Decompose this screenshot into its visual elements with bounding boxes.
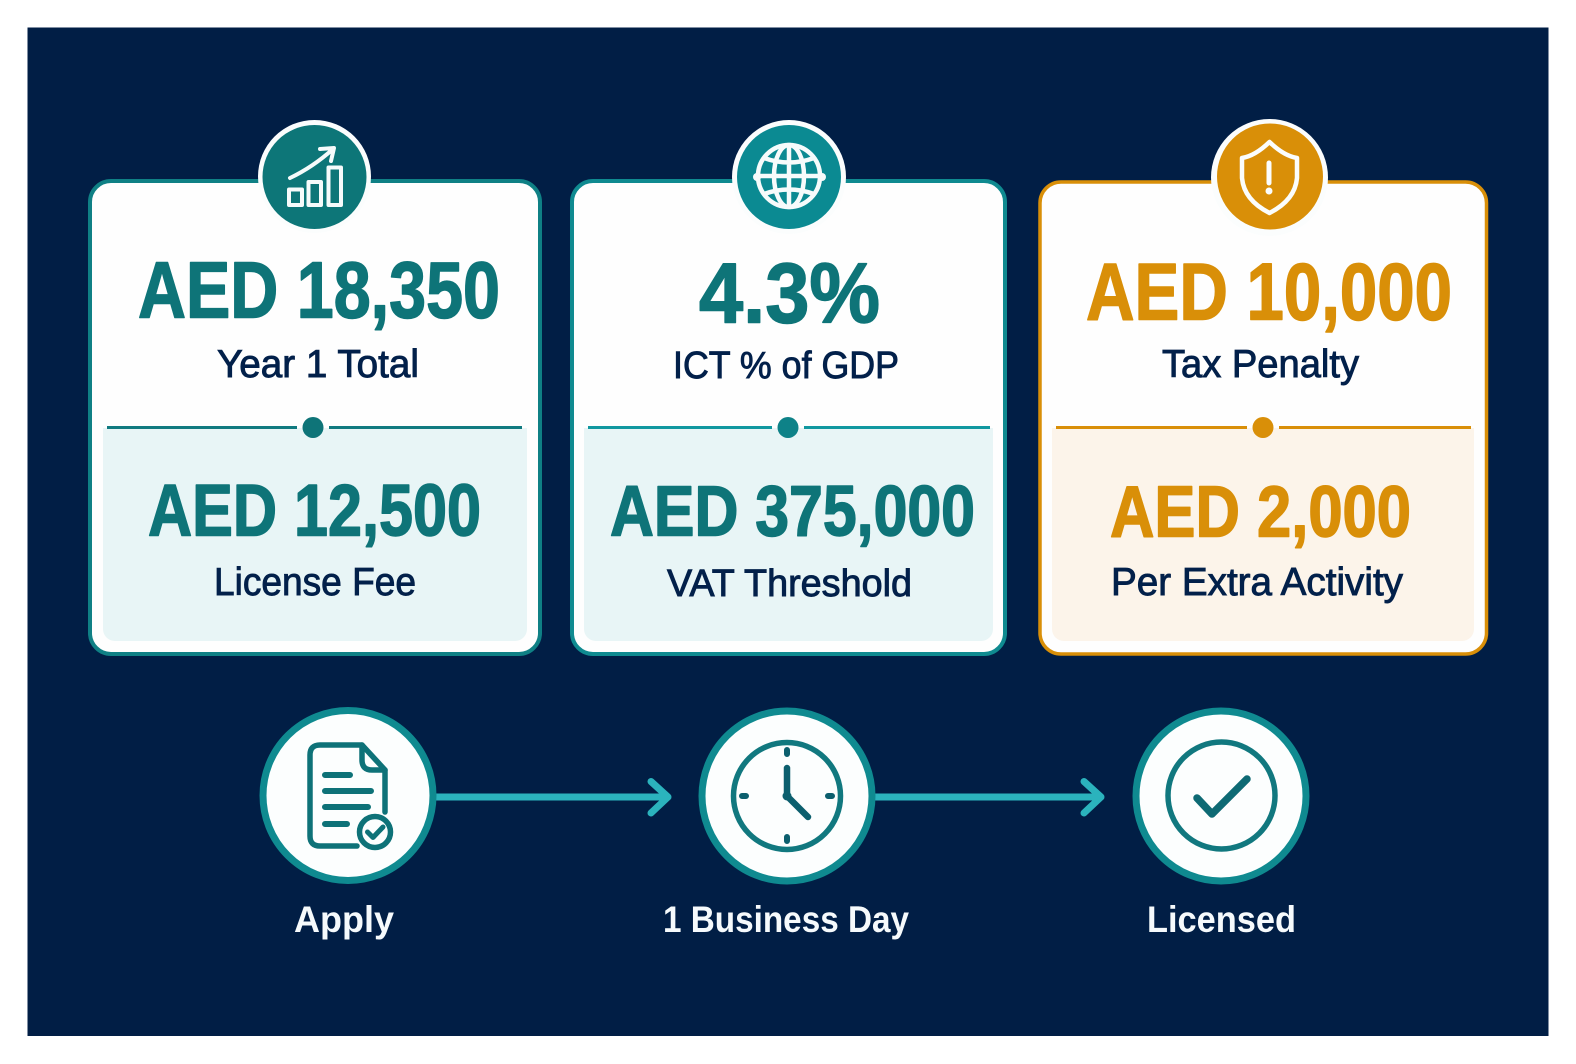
divider dot: [1252, 417, 1274, 438]
lower tint area: [1052, 428, 1474, 641]
label: Year 1 Total: Year 1 Total: [217, 343, 419, 386]
arrow: review to licensed: [873, 782, 1101, 813]
label: License Fee: License Fee: [214, 561, 416, 604]
card frame: [1040, 182, 1486, 654]
label: VAT Threshold: VAT Threshold: [667, 563, 912, 605]
divider dot: [302, 417, 324, 438]
value: 4.3%: 4.3%: [699, 246, 880, 342]
value: AED 12,500: AED 12,500: [148, 470, 481, 552]
label: Tax Penalty: Tax Penalty: [1162, 343, 1359, 386]
panel: ICT and VAT card: [572, 120, 1005, 654]
card frame: [90, 181, 540, 654]
icon: rising bar chart: [258, 120, 371, 233]
panel: year 1 cost card: [90, 120, 540, 654]
step: 1 Business Day: [663, 711, 909, 940]
label: ICT % of GDP: ICT % of GDP: [673, 345, 899, 387]
value: AED 375,000: AED 375,000: [610, 472, 975, 552]
divider dot: [778, 417, 798, 438]
label: Apply: Apply: [294, 899, 394, 940]
value: AED 10,000: AED 10,000: [1086, 248, 1452, 338]
lower tint area: [584, 428, 993, 641]
step: Apply: [263, 710, 433, 940]
label: 1 Business Day: 1 Business Day: [663, 899, 909, 940]
icon: check in circle: [1136, 711, 1306, 881]
icon: globe: [732, 120, 846, 234]
card frame: [572, 181, 1005, 654]
value: AED 18,350: AED 18,350: [138, 246, 500, 334]
label: Licensed: Licensed: [1147, 899, 1296, 940]
step: Licensed: [1136, 711, 1306, 940]
arrow: apply to review: [434, 782, 668, 813]
value: AED 2,000: AED 2,000: [1110, 472, 1411, 552]
icon: warning shield: [1211, 119, 1328, 236]
label: Per Extra Activity: Per Extra Activity: [1111, 561, 1403, 604]
icon: document with check: [263, 710, 433, 880]
icon: clock: [702, 711, 872, 881]
panel: penalties card: [1040, 119, 1486, 654]
lower tint area: [103, 428, 527, 641]
